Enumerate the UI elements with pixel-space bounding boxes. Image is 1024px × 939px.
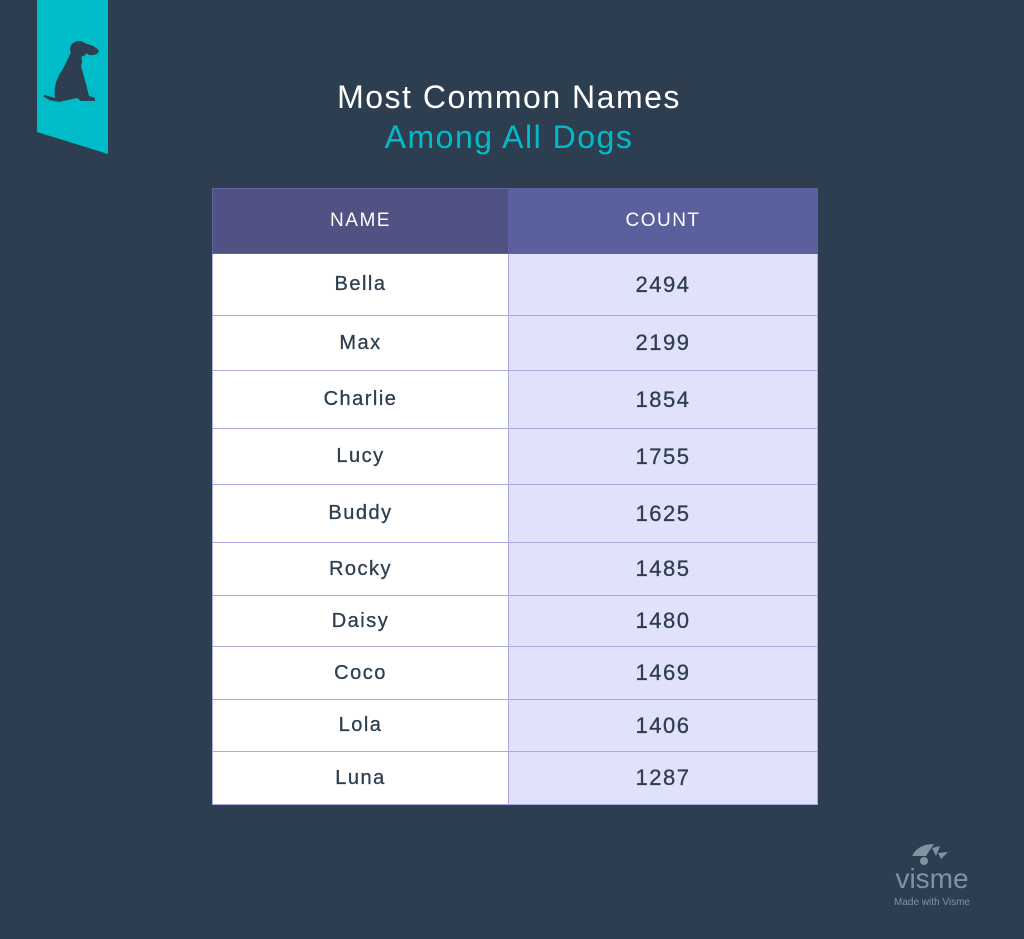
table: 2199 bbox=[636, 330, 690, 355]
table: 2494 bbox=[636, 272, 690, 296]
table: Charlie bbox=[324, 388, 397, 410]
table: 1625 bbox=[636, 500, 690, 526]
table: Coco bbox=[334, 662, 387, 684]
table: NAME bbox=[330, 210, 391, 231]
title: Most Common Names bbox=[337, 79, 681, 115]
icon: dog badge bbox=[37, 0, 108, 154]
table: 1485 bbox=[636, 556, 690, 581]
table: Rocky bbox=[329, 558, 392, 580]
table: 1469 bbox=[636, 660, 690, 685]
table: COUNT bbox=[625, 210, 701, 231]
subtitle: Among All Dogs bbox=[385, 119, 633, 155]
table bbox=[212, 188, 818, 805]
logo: visme bbox=[894, 844, 970, 908]
table: Lola bbox=[339, 714, 382, 736]
table: Lucy bbox=[336, 445, 385, 467]
table: 1480 bbox=[636, 608, 690, 633]
logo: visme: Made with Visme bbox=[894, 897, 970, 908]
table: Bella bbox=[334, 273, 386, 295]
icon: dog silhouette bbox=[43, 41, 99, 102]
table: 1406 bbox=[636, 712, 690, 738]
table: Daisy bbox=[332, 610, 389, 632]
table: 1854 bbox=[636, 386, 690, 412]
table: 1755 bbox=[636, 444, 690, 468]
table: Buddy bbox=[328, 502, 393, 524]
table: 1287 bbox=[636, 765, 690, 790]
table: Max bbox=[339, 332, 382, 354]
logo: visme: visme bbox=[895, 863, 969, 894]
table: Luna bbox=[335, 766, 386, 788]
